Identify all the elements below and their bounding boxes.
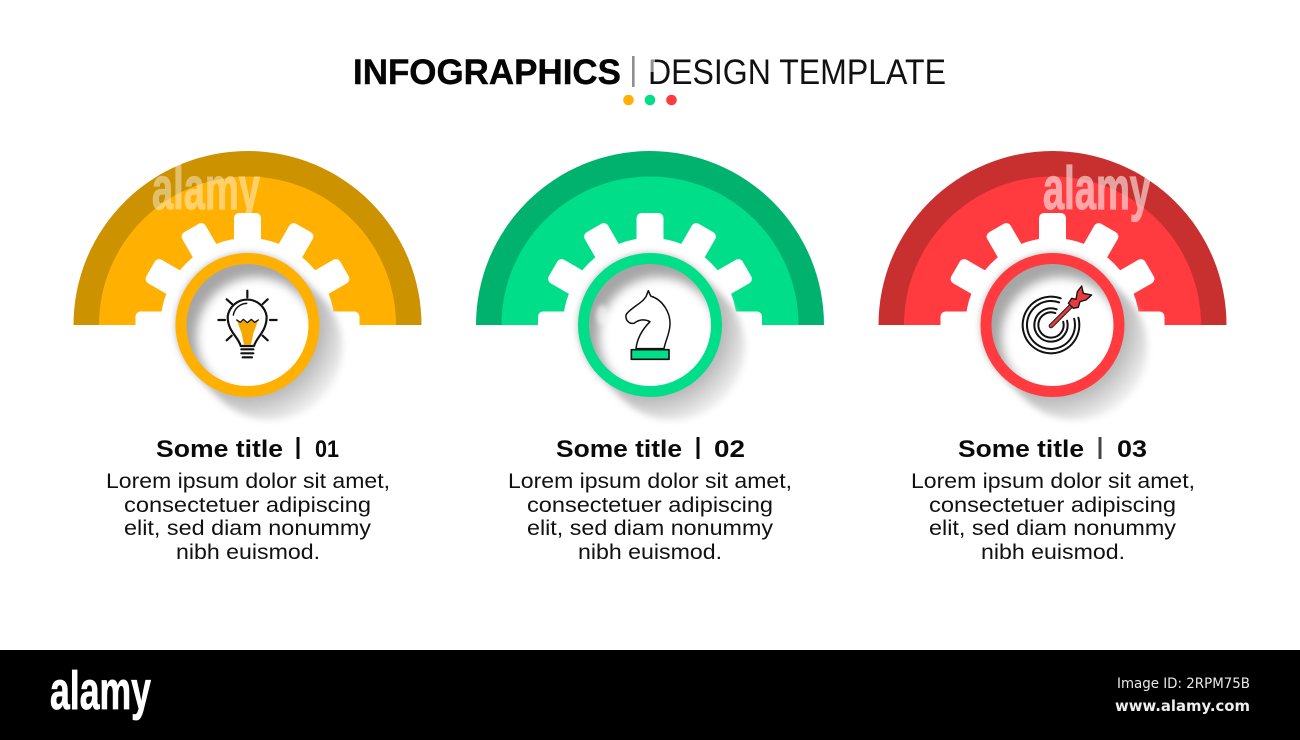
step heading 01	[156, 436, 339, 463]
step text 01: consectetuer adipiscing	[124, 494, 371, 517]
icon: target with dart	[1023, 286, 1092, 353]
step heading 01: Some title	[156, 436, 283, 463]
footer bar	[0, 650, 1300, 740]
step text 01: elit, sed diam nonummy	[124, 517, 372, 540]
title: DESIGN TEMPLATE	[648, 53, 946, 92]
step text 03: Lorem ipsum dolor sit amet,	[911, 470, 1195, 493]
panel: step 03	[878, 151, 1226, 564]
footer logo: alamy	[50, 661, 151, 721]
step heading 03: Some title	[958, 436, 1084, 463]
step text 03: nibh euismod.	[981, 541, 1125, 564]
title: INFOGRAPHICS	[353, 53, 621, 92]
step heading 03: 03	[1117, 436, 1147, 463]
step text 01	[106, 470, 390, 564]
step text 03	[911, 470, 1195, 564]
footer image id: Image ID: 2RPM75B	[1117, 676, 1250, 692]
step heading 03	[958, 436, 1147, 463]
step text 01: Lorem ipsum dolor sit amet,	[106, 470, 390, 493]
panel: step 01	[74, 151, 422, 564]
icon: chess knight	[626, 291, 670, 359]
step text 02	[508, 470, 792, 564]
watermark left: alamy	[152, 155, 260, 222]
step heading 02: Some title	[556, 436, 682, 463]
panel: step 02	[476, 151, 824, 564]
icon: light bulb	[218, 291, 277, 357]
step text 02: nibh euismod.	[578, 541, 722, 564]
half gear graphic 02	[476, 151, 824, 412]
footer url: www.alamy.com	[1115, 697, 1250, 715]
step text 02: elit, sed diam nonummy	[527, 517, 774, 540]
step heading 01: 01	[315, 436, 339, 463]
step text 01: nibh euismod.	[176, 541, 320, 564]
step text 02: consectetuer adipiscing	[527, 494, 773, 517]
half gear graphic 01	[74, 151, 422, 412]
title	[353, 53, 946, 92]
step text 03: consectetuer adipiscing	[929, 494, 1176, 517]
title colour dots	[623, 95, 677, 105]
half gear graphic 03	[878, 151, 1226, 412]
step text 03: elit, sed diam nonummy	[929, 517, 1177, 540]
step text 02: Lorem ipsum dolor sit amet,	[508, 470, 792, 493]
step heading 02	[556, 436, 745, 463]
step heading 02: 02	[714, 436, 745, 463]
watermark right: alamy	[1043, 155, 1151, 222]
